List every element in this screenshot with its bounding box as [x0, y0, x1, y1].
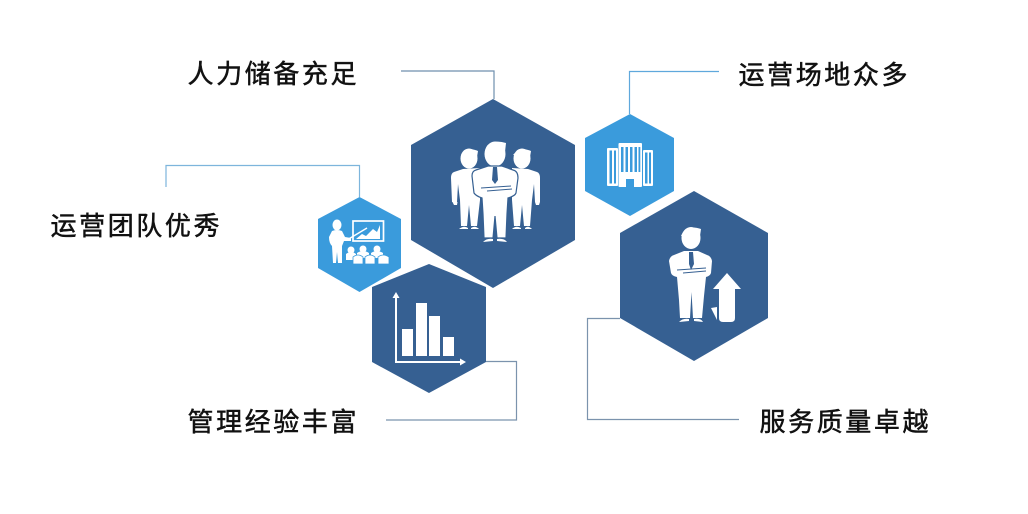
icon: presenter figure	[329, 220, 367, 263]
connector: bottom right	[588, 318, 739, 420]
icon: left man	[451, 148, 480, 229]
icon: man	[669, 227, 712, 322]
hexagon: buildings	[585, 114, 674, 216]
icon: chart board	[353, 221, 384, 241]
hexagon: bar chart	[372, 264, 486, 393]
connector: left	[166, 166, 360, 197]
label: top centre: 人力储备充足	[188, 59, 359, 89]
hexagon: man with up arrow	[620, 191, 768, 361]
label: bottom right: 服务质量卓越	[760, 407, 931, 437]
label: left: 运营团队优秀	[50, 211, 222, 241]
connector: top centre	[401, 71, 494, 99]
icon: centre man	[472, 142, 518, 242]
connector: top right	[630, 72, 719, 114]
icon: buildings	[607, 143, 653, 187]
icon: up arrow	[711, 273, 741, 322]
icon: bar chart	[392, 292, 466, 366]
icon: right man	[512, 148, 540, 229]
label: top right: 运营场地众多	[738, 60, 910, 90]
icon: audience	[346, 246, 389, 264]
hexagon: team of three men	[411, 99, 575, 288]
label: bottom left: 管理经验丰富	[188, 407, 359, 437]
connector: bottom left	[386, 362, 516, 420]
hexagon: presenter	[318, 197, 401, 292]
